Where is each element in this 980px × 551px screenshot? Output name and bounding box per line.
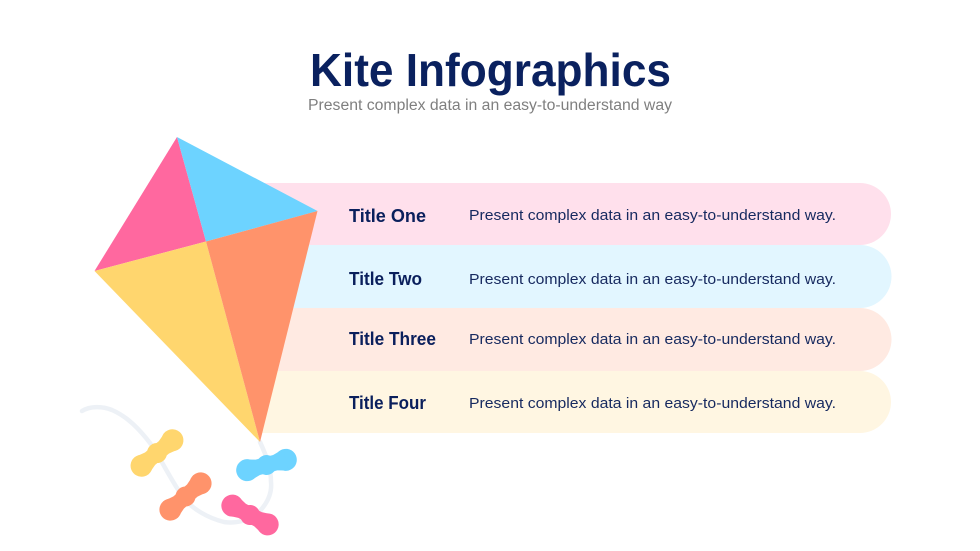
heading: title four: Title Four xyxy=(349,393,426,413)
band: title one xyxy=(258,183,891,245)
text: description three: Present complex data in an easy-to-understand way. xyxy=(469,331,836,348)
subtitle: Present complex data in an easy-to-understand way xyxy=(308,97,672,114)
title: Kite Infographics xyxy=(310,44,671,96)
text: description two: Present complex data in an easy-to-understand way. xyxy=(469,271,836,288)
kite panel: yellow xyxy=(94,242,260,442)
kite xyxy=(94,137,318,442)
kite string xyxy=(82,407,271,523)
kite panel: orange xyxy=(206,211,318,442)
kite panel: blue xyxy=(177,137,318,242)
icon: blue bow xyxy=(234,446,299,484)
band: title four xyxy=(258,371,891,433)
icon: orange bow xyxy=(155,468,216,525)
text: description one: Present complex data in an easy-to-understand way. xyxy=(469,207,836,224)
heading: title two: Title Two xyxy=(349,269,422,289)
band: title three xyxy=(258,308,892,371)
kite panel: pink xyxy=(94,137,206,271)
heading: title three: Title Three xyxy=(349,329,436,349)
heading: title one: Title One xyxy=(349,206,426,226)
icon: pink bow xyxy=(217,491,283,539)
text: description four: Present complex data in an easy-to-understand way. xyxy=(469,395,836,412)
icon: yellow bow xyxy=(126,425,188,481)
band: title two xyxy=(258,245,892,308)
